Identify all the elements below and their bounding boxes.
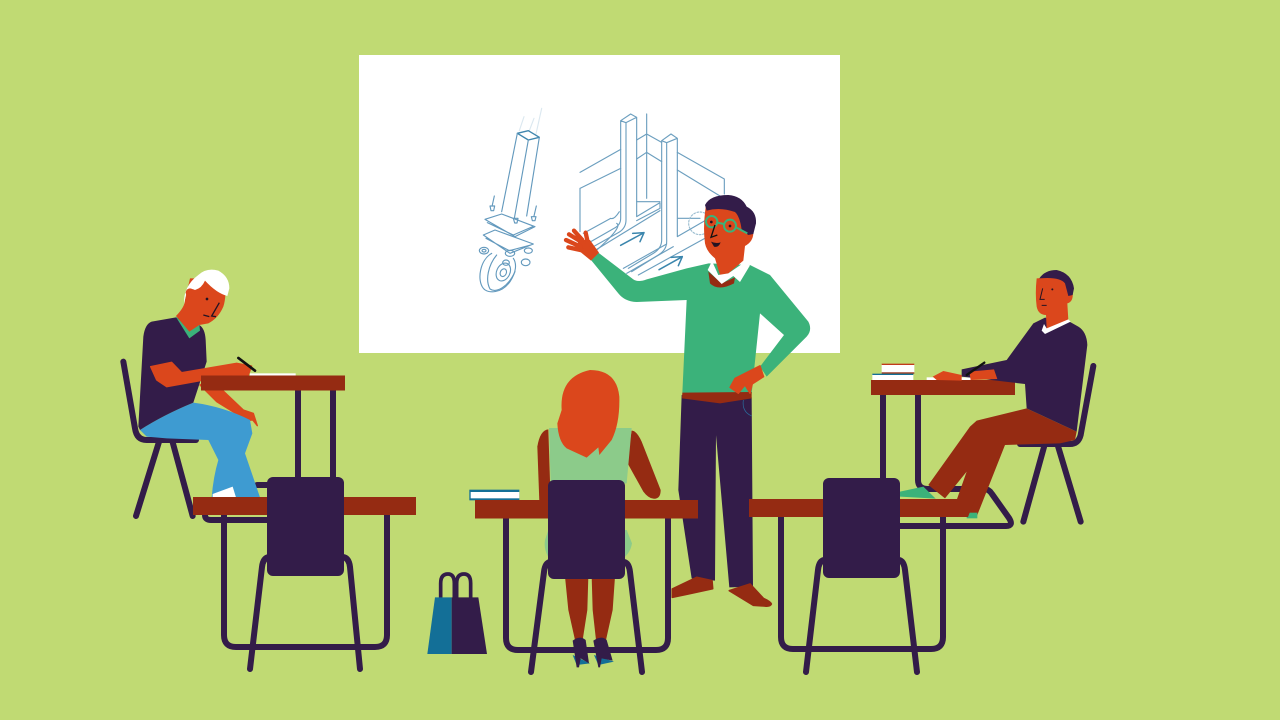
sweater neck <box>708 272 735 287</box>
front desk middle <box>475 480 698 672</box>
hands <box>933 371 962 381</box>
chair legs <box>531 562 642 672</box>
teacher shoes <box>672 577 771 606</box>
left student chair <box>123 362 196 516</box>
glasses <box>706 216 747 233</box>
sock <box>213 487 236 497</box>
sweater <box>962 318 1087 432</box>
sweater hem <box>682 392 752 403</box>
paper <box>927 377 972 380</box>
blue arrows on drawing <box>621 233 682 270</box>
technical drawing: rails in corner <box>580 114 724 275</box>
teal shoes <box>573 655 614 665</box>
second arm <box>200 378 257 426</box>
teacher head <box>704 203 753 275</box>
shirt collar <box>708 261 750 284</box>
teacher trousers <box>678 395 753 587</box>
collar <box>175 316 200 338</box>
upper desk right <box>871 380 1015 489</box>
teacher sweater <box>591 253 810 393</box>
trouser pocket <box>743 400 752 416</box>
dress skirt <box>545 530 632 560</box>
hand on hip <box>730 366 764 393</box>
face marks <box>1040 288 1047 305</box>
small books on front desk <box>469 490 519 500</box>
pen <box>238 358 255 371</box>
pen <box>967 363 984 375</box>
collar <box>1042 319 1071 334</box>
navy shoes <box>573 638 613 667</box>
face marks <box>203 303 219 317</box>
technical drawing: caster wheel <box>479 108 542 292</box>
dress top <box>549 428 632 483</box>
hair <box>184 270 229 304</box>
right arm <box>627 431 661 499</box>
pointing hand <box>566 231 599 261</box>
shoes <box>900 487 936 499</box>
teacher hair <box>705 195 756 235</box>
face details <box>711 225 717 237</box>
right student chair <box>1020 366 1093 522</box>
woman student <box>537 370 661 667</box>
trousers <box>928 408 1077 517</box>
chair back <box>267 477 344 576</box>
jeans <box>140 403 260 497</box>
hair <box>1039 270 1074 296</box>
shirt <box>138 317 207 430</box>
legs <box>565 577 615 640</box>
books <box>882 364 914 373</box>
head <box>176 278 226 332</box>
chair legs <box>250 557 360 669</box>
front desk left <box>193 477 416 669</box>
right student <box>872 270 1087 518</box>
whiteboard <box>359 55 840 353</box>
teacher <box>566 195 810 606</box>
bag navy half <box>452 597 487 654</box>
chair back <box>823 478 900 578</box>
bag <box>427 574 487 654</box>
writing arm <box>151 362 252 387</box>
left arm <box>537 429 551 502</box>
chair legs <box>806 560 917 672</box>
hair <box>557 370 619 458</box>
bag handles <box>441 574 471 598</box>
ear <box>186 288 194 297</box>
chair back <box>548 480 625 579</box>
head <box>1036 277 1073 329</box>
paper <box>250 373 296 376</box>
left student <box>138 270 296 497</box>
foot rails <box>205 485 1011 526</box>
bag teal half <box>427 597 452 654</box>
front desk right <box>749 478 975 672</box>
upper desk left <box>201 376 345 478</box>
